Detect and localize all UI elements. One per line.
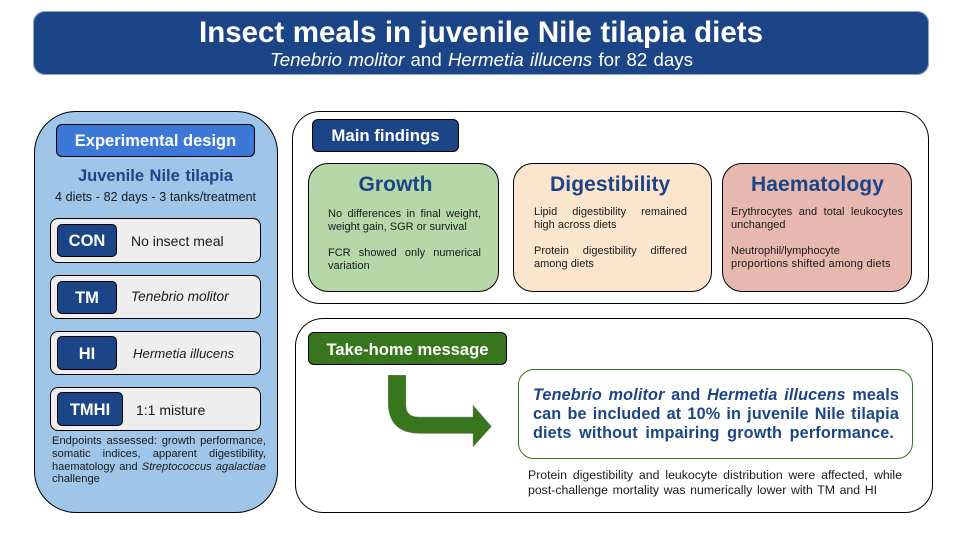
card text: digestibility findings: among diets — [534, 258, 594, 270]
card text: digestibility findings: Protein digestibility differed — [534, 245, 687, 257]
label: no insect meal: No insect meal — [131, 233, 224, 249]
diet row: TMHI — [50, 387, 261, 431]
panel: experimental design — [34, 111, 278, 513]
text: endpoints assessed: challenge — [52, 473, 100, 485]
card text: haematology findings: Erythrocytes and total leukocytes — [731, 206, 903, 218]
card: growth — [308, 163, 499, 292]
card text: growth findings: No differences in final weight, — [328, 208, 481, 220]
card text: haematology findings — [731, 206, 903, 270]
diet row: CON — [50, 218, 261, 263]
panel: take-home message — [295, 318, 933, 513]
card: digestibility — [513, 163, 712, 292]
card text: digestibility findings: Lipid digestibility remained — [534, 206, 687, 218]
heading: take-home message — [308, 332, 507, 365]
badge: TMHI: TMHI — [70, 401, 110, 419]
title banner — [33, 11, 929, 75]
card text: growth findings: FCR showed only numerical — [328, 247, 481, 259]
callout line 1: Tenebrio molitor and Hermetia illucens meals — [533, 386, 899, 404]
diet row: TM — [50, 275, 261, 319]
card title: growth: Growth — [358, 173, 433, 196]
diet row: HI — [50, 331, 261, 375]
card text: growth findings: variation — [328, 260, 370, 272]
heading: experimental design — [56, 124, 255, 157]
badge: TMHI — [57, 392, 123, 426]
card text: haematology findings: proportions shifted among diets — [731, 258, 891, 270]
card: haematology — [722, 163, 912, 292]
badge: CON: CON — [69, 232, 105, 250]
text: study summary: 4 diets - 82 days - 3 tanks/treatment — [55, 190, 256, 204]
callout line 2: can be included at 10% in juvenile Nile tilapia — [533, 405, 899, 423]
panel: main findings — [292, 111, 929, 304]
text: endpoints assessed — [52, 435, 266, 485]
card title: digestibility: Digestibility — [550, 173, 670, 196]
label: 1:1 mixture: 1:1 misture — [136, 402, 205, 418]
card text: digestibility findings — [534, 206, 687, 270]
text: secondary effects — [528, 468, 902, 497]
card text: haematology findings: Neutrophil/lymphocyte — [731, 245, 840, 257]
heading: main findings — [312, 119, 459, 152]
card text: growth findings: weight gain, SGR or survival — [328, 221, 467, 233]
text: endpoints assessed: Endpoints assessed: growth performance, — [52, 435, 266, 447]
badge: CON — [57, 224, 117, 257]
label: Hermetia illucens: Hermetia illucens — [133, 346, 234, 361]
badge: HI — [57, 336, 117, 370]
card text: haematology findings: unchanged — [731, 219, 785, 231]
subtitle: Tenebrio molitor and Hermetia illucens for 82 days — [270, 49, 693, 70]
label: Tenebrio molitor: Tenebrio molitor — [131, 289, 229, 304]
title: Insect meals in juvenile Nile tilapia diets — [199, 16, 763, 49]
card title: haematology: Haematology — [751, 173, 884, 196]
subheading: juvenile Nile tilapia: Juvenile Nile tilapia — [78, 167, 233, 185]
callout: key conclusion — [518, 369, 913, 459]
text: secondary effects: Protein digestibility and leukocyte distribution were affected, while — [528, 468, 902, 482]
text: endpoints assessed: haematology and Streptococcus agalactiae — [52, 461, 266, 473]
badge: TM — [57, 281, 117, 314]
text: secondary effects: post-challenge mortality was numerically lower with TM and HI — [528, 483, 877, 497]
callout line 3: diets without impairing growth performance. — [533, 424, 894, 442]
card text: digestibility findings: high across diets — [534, 219, 617, 231]
badge: HI: HI — [79, 345, 95, 363]
heading: take-home message: Take-home message — [326, 340, 488, 359]
badge: TM: TM — [75, 289, 99, 307]
heading: experimental design: Experimental design — [75, 132, 236, 150]
text: endpoints assessed: somatic indices, apparent digestibility, — [52, 448, 266, 460]
card text: growth findings — [328, 208, 481, 272]
heading: main findings: Main findings — [331, 126, 440, 145]
arrow: to conclusion — [388, 375, 492, 447]
